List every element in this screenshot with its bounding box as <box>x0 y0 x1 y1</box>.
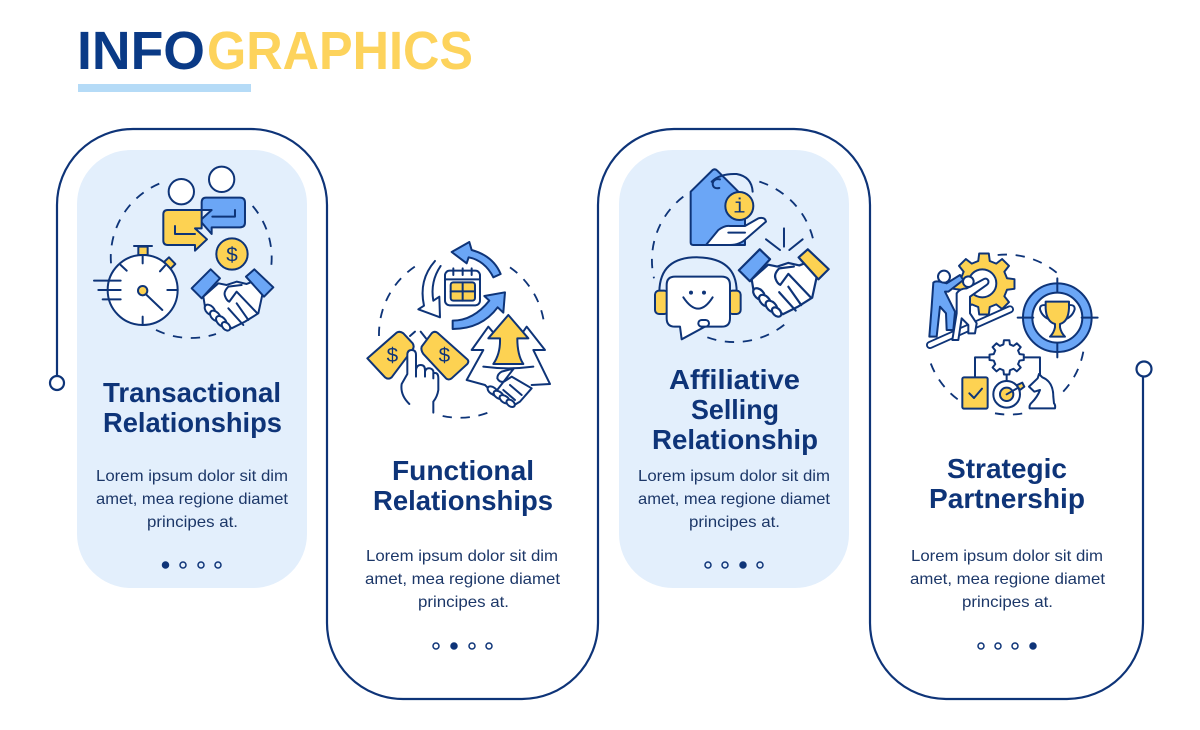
heading: Strategic Partnership <box>929 453 1085 514</box>
text block: card 4 description: amet, mea regione diamet <box>910 571 1106 588</box>
text block: card 4 description: principes at. <box>962 594 1053 611</box>
heading: Transactional Relationships: Relationships <box>103 407 282 438</box>
icon: functional relationships: $ <box>387 344 399 367</box>
icon: strategic partnership <box>929 254 1098 415</box>
title: GRAPHICS <box>207 21 473 81</box>
text block: card 3 description: principes at. <box>689 514 780 531</box>
heading: Affiliative Selling Relationship: Selling <box>691 394 779 425</box>
pagination dots: card 4 <box>978 643 1036 649</box>
text block: card 4 description: Lorem ipsum dolor sit dim <box>911 548 1103 565</box>
heading: Transactional Relationships <box>103 377 282 438</box>
title underline bar <box>78 84 251 92</box>
text block: card 2 description: amet, mea regione diamet <box>365 571 561 588</box>
text block: card 2 description: principes at. <box>418 594 509 611</box>
text block: card 1 description: Lorem ipsum dolor sit dim <box>96 468 288 485</box>
icon: functional relationships: $ <box>439 344 451 367</box>
icon: transactional relationships: $ <box>226 243 238 266</box>
text block: card 1 description: principes at. <box>147 514 238 531</box>
heading: Affiliative Selling Relationship: Affiliative <box>669 364 800 395</box>
text block: card 2 description: Lorem ipsum dolor sit dim <box>366 548 558 565</box>
pagination dots: card 3 <box>705 562 763 568</box>
heading: Affiliative Selling Relationship <box>652 364 818 455</box>
icon: affiliative selling relationship: i <box>733 197 746 220</box>
title: INFO <box>77 21 205 81</box>
text block: card 3 description <box>638 468 831 531</box>
text block: card 4 description <box>910 548 1106 611</box>
pagination dots: card 1 <box>162 562 221 568</box>
text block: card 2 description <box>365 548 561 611</box>
heading: Functional Relationships: Functional <box>392 455 534 486</box>
text block: card 3 description: Lorem ipsum dolor sit dim <box>638 468 830 485</box>
serpentine outline frame <box>50 129 1152 699</box>
icon: functional relationships <box>367 242 550 418</box>
text block: card 1 description <box>96 468 289 531</box>
heading: Functional Relationships: Relationships <box>373 485 553 516</box>
panel: background card 3 <box>619 150 849 588</box>
title <box>77 21 473 81</box>
heading: Strategic Partnership: Strategic <box>947 453 1067 484</box>
panel: background card 1 <box>77 150 307 588</box>
icon: affiliative selling relationship <box>652 169 829 342</box>
icon: transactional relationships <box>94 167 273 338</box>
heading: Affiliative Selling Relationship: Relationship <box>652 424 818 455</box>
text block: card 3 description: amet, mea regione diamet <box>638 491 831 508</box>
heading: Strategic Partnership: Partnership <box>929 483 1085 514</box>
heading: Functional Relationships <box>373 455 553 516</box>
pagination dots: card 2 <box>433 643 492 649</box>
text block: card 1 description: amet, mea regione diamet <box>96 491 289 508</box>
heading: Transactional Relationships: Transactional <box>103 377 281 408</box>
